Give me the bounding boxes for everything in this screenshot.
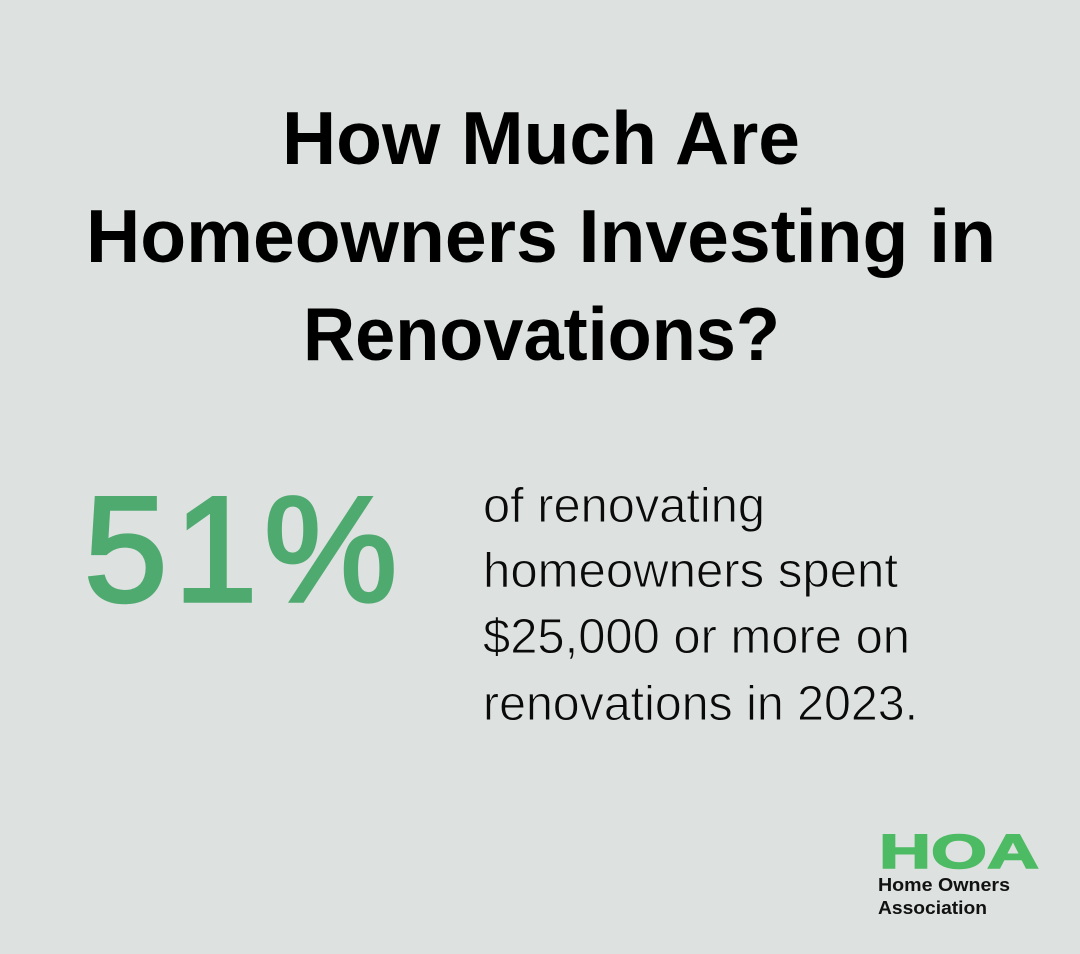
- statistic description: homeowners spent: [483, 544, 898, 598]
- logo mark: HOA: HOA: [879, 826, 1039, 879]
- logo wordmark: [878, 874, 1010, 918]
- title: Renovations?: [303, 292, 780, 376]
- title: How Much Are: [282, 96, 800, 180]
- logo wordmark: Home Owners: [878, 874, 1010, 895]
- logo wordmark: Association: [878, 897, 987, 918]
- statistic description: of renovating: [483, 479, 765, 533]
- statistic description: [483, 479, 918, 731]
- title: Homeowners Investing in: [86, 194, 996, 278]
- title: [86, 96, 996, 376]
- statistic description: $25,000 or more on: [483, 610, 910, 664]
- statistic description: renovations in 2023.: [483, 677, 918, 731]
- big statistic: 51%: 51%: [84, 465, 397, 633]
- logo: Home Owners Association: [878, 826, 1039, 918]
